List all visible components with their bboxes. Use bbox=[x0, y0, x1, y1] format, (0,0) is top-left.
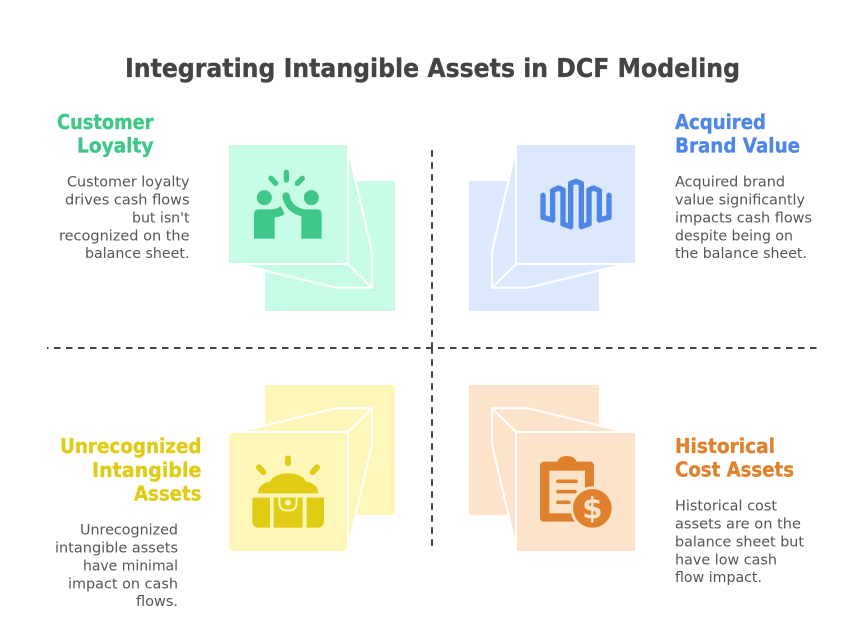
text: unrecognized intangible assets description: flows. bbox=[136, 594, 178, 610]
icon: treasure chest bbox=[252, 458, 324, 528]
panel: unrecognized intangible assets bbox=[55, 385, 395, 610]
text: customer loyalty description bbox=[59, 174, 190, 262]
text: historical cost assets description: have low cash bbox=[675, 552, 777, 568]
text: acquired brand value description bbox=[675, 174, 812, 262]
icon: wave logo bbox=[543, 181, 609, 227]
text: unrecognized intangible assets description bbox=[55, 522, 178, 610]
text: customer loyalty description: Customer loyalty bbox=[67, 174, 190, 190]
text: acquired brand value description: value significantly bbox=[675, 192, 805, 208]
text: acquired brand value description: despite being on bbox=[675, 228, 793, 244]
text: historical cost assets description: flow impact. bbox=[675, 570, 762, 586]
cube: blue bbox=[469, 145, 635, 311]
panel: historical cost assets bbox=[469, 385, 805, 586]
text: unrecognized intangible assets description: impact on cash bbox=[68, 576, 178, 592]
text: unrecognized intangible assets description: have minimal bbox=[83, 558, 178, 574]
cube: yellow bbox=[229, 385, 395, 551]
text: acquired brand value description: Acquired brand bbox=[675, 174, 785, 190]
text: unrecognized intangible assets description: Unrecognized bbox=[80, 522, 178, 538]
panel: acquired brand value bbox=[469, 110, 812, 311]
heading: unrecognized intangible assets: Unrecognized bbox=[60, 434, 202, 458]
heading: unrecognized intangible assets: Assets bbox=[134, 482, 202, 506]
panel: customer loyalty bbox=[57, 110, 395, 311]
heading: customer loyalty: Customer bbox=[57, 110, 154, 134]
text: historical cost assets description: Historical cost bbox=[675, 498, 778, 514]
heading: historical cost assets: Cost Assets bbox=[675, 458, 794, 482]
text: acquired brand value description: impacts cash flows bbox=[675, 210, 812, 226]
text: historical cost assets description bbox=[675, 498, 805, 586]
text: acquired brand value description: the balance sheet. bbox=[675, 246, 807, 262]
text: customer loyalty description: but isn't bbox=[132, 210, 190, 226]
text: unrecognized intangible assets description: intangible assets bbox=[55, 540, 178, 556]
cube: orange bbox=[469, 385, 635, 551]
heading: historical cost assets: Historical bbox=[675, 434, 775, 458]
heading: customer loyalty: Loyalty bbox=[77, 134, 154, 158]
title: Integrating Intangible Assets in DCF Modeling bbox=[125, 54, 740, 84]
heading: customer loyalty bbox=[57, 110, 154, 158]
text: customer loyalty description: drives cash flows bbox=[65, 192, 190, 208]
heading: acquired brand value: Acquired bbox=[675, 110, 766, 134]
heading: acquired brand value bbox=[675, 110, 800, 158]
text: customer loyalty description: recognized on the bbox=[59, 228, 190, 244]
icon: high five bbox=[254, 172, 322, 239]
icon: clipboard with dollar coin bbox=[540, 456, 614, 530]
cube: green bbox=[229, 145, 395, 311]
heading: acquired brand value: Brand Value bbox=[675, 134, 800, 158]
heading: historical cost assets bbox=[675, 434, 794, 482]
text: historical cost assets description: assets are on the bbox=[675, 516, 801, 532]
text: customer loyalty description: balance sheet. bbox=[85, 246, 190, 262]
text: historical cost assets description: balance sheet but bbox=[675, 534, 805, 550]
heading: unrecognized intangible assets: Intangible bbox=[92, 458, 202, 482]
heading: unrecognized intangible assets bbox=[60, 434, 202, 506]
icon: clipboard with dollar coin: $ bbox=[582, 492, 603, 526]
